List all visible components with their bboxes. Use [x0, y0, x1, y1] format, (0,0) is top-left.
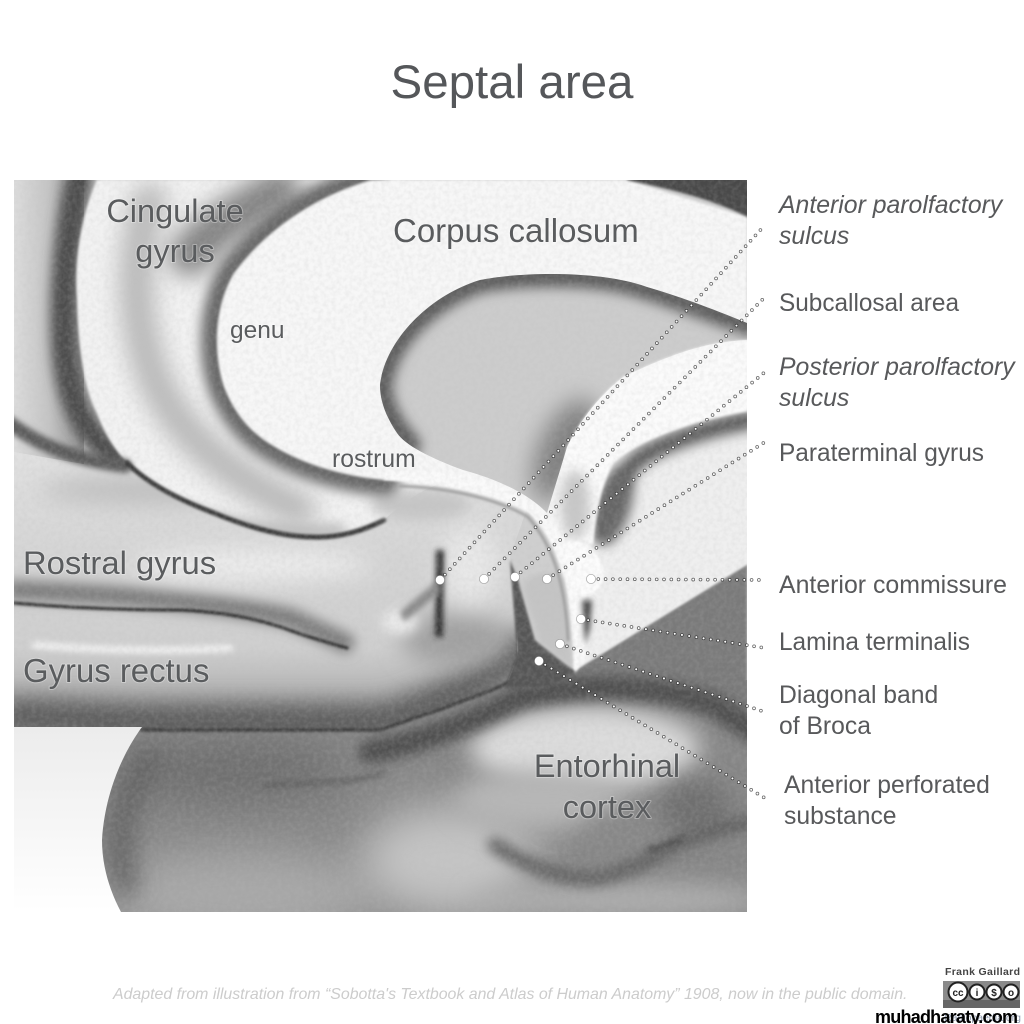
licence badge and credit	[875, 966, 1021, 1024]
panel: brain illustration	[8, 175, 770, 940]
label: Anterior parolfactory sulcus: sulcus	[779, 223, 849, 250]
rostral gyrus shading	[14, 590, 345, 643]
icon: creative commons badge: i	[976, 988, 979, 999]
rostrum underside blend	[370, 490, 470, 520]
far-left gyrus	[14, 180, 84, 470]
label: Diagonal band of Broca: of Broca	[779, 713, 871, 740]
frontal gyri	[14, 445, 534, 735]
frontal pole	[400, 612, 510, 668]
dotted leader lines	[435, 225, 768, 800]
label: Anterior parolfactory sulcus: Anterior parolfactory	[779, 192, 1002, 219]
label: Subcallosal area: Subcallosal area	[779, 290, 959, 317]
paper texture	[14, 180, 747, 912]
label: Paraterminal gyrus: Paraterminal gyrus	[779, 440, 984, 467]
sulcus beneath the cingulate gyrus	[127, 463, 384, 537]
rostrum to lamina tract	[384, 472, 586, 673]
icon: creative commons badge: $	[991, 988, 997, 999]
diagonal sulcus at left edge	[8, 422, 125, 466]
label: Posterior parolfactory sulcus: Posterior parolfactory	[779, 354, 1015, 381]
title: Septal area	[391, 56, 634, 109]
paraterminal gyrus	[522, 573, 572, 668]
Radiopaedia credit: Radiopaedia.org	[944, 1012, 1021, 1024]
sulcus at the frontal margin	[505, 560, 576, 690]
author signature: Frank Gaillard	[945, 966, 1020, 978]
entorhinal cortex	[264, 706, 750, 878]
parolfactory sulcus mark	[400, 550, 444, 637]
dark wedge below the lamina	[558, 564, 747, 707]
cingulate gyrus	[76, 180, 460, 537]
white corner	[14, 727, 142, 912]
label: Corpus callosum: Corpus callosum	[393, 212, 639, 249]
label: Rostral gyrus: Rostral gyrus	[23, 544, 216, 581]
label: Posterior parolfactory sulcus: sulcus	[779, 385, 849, 412]
shadow below commissure	[582, 600, 592, 645]
label: Entorhinal cortex: cortex	[563, 789, 651, 825]
labels on illustration	[23, 193, 680, 825]
dark top-right corner	[626, 180, 747, 218]
corpus callosum	[217, 180, 747, 673]
icon: creative commons badge: o	[1008, 988, 1014, 999]
label: Gyrus rectus: Gyrus rectus	[23, 652, 209, 689]
label: Cingulate gyrus: Cingulate	[106, 193, 244, 229]
label: Lamina terminalis: Lamina terminalis	[779, 629, 970, 656]
label: rostrum: rostrum	[332, 446, 416, 473]
fornix	[555, 340, 750, 545]
anterior commissure	[568, 541, 603, 596]
rostral sulcus	[14, 603, 347, 648]
icon: creative commons badge: cc	[952, 988, 964, 999]
label: Cingulate gyrus: gyrus	[135, 233, 215, 269]
gyrus rectus lower shadow	[14, 650, 520, 722]
leader end points	[435, 572, 596, 666]
dark orbital band	[370, 688, 755, 752]
attribution text: Adapted from illustration from “Sobotta's Textbook and Atlas of Human Anatomy” 1908, now in the public domain.	[112, 986, 907, 1003]
label: Anterior perforated substance: Anterior perforated	[784, 772, 990, 799]
label: genu: genu	[230, 317, 285, 344]
label: Anterior perforated substance: substance	[784, 803, 897, 830]
label: Diagonal band of Broca: Diagonal band	[779, 682, 938, 709]
dark sulcus left of the cingulate gyrus	[64, 175, 128, 468]
temporal lobe	[102, 680, 747, 912]
label: Entorhinal cortex: Entorhinal	[534, 748, 680, 784]
pale hypothalamic wedge	[580, 410, 750, 667]
right-hand anatomical labels	[777, 192, 1016, 830]
label: Anterior commissure: Anterior commissure	[779, 572, 1007, 599]
icon: creative commons badge	[943, 981, 1020, 1008]
ventricle and septum	[380, 274, 747, 513]
lower frontal margin	[140, 675, 511, 734]
gyrus rectus highlight	[35, 645, 230, 650]
